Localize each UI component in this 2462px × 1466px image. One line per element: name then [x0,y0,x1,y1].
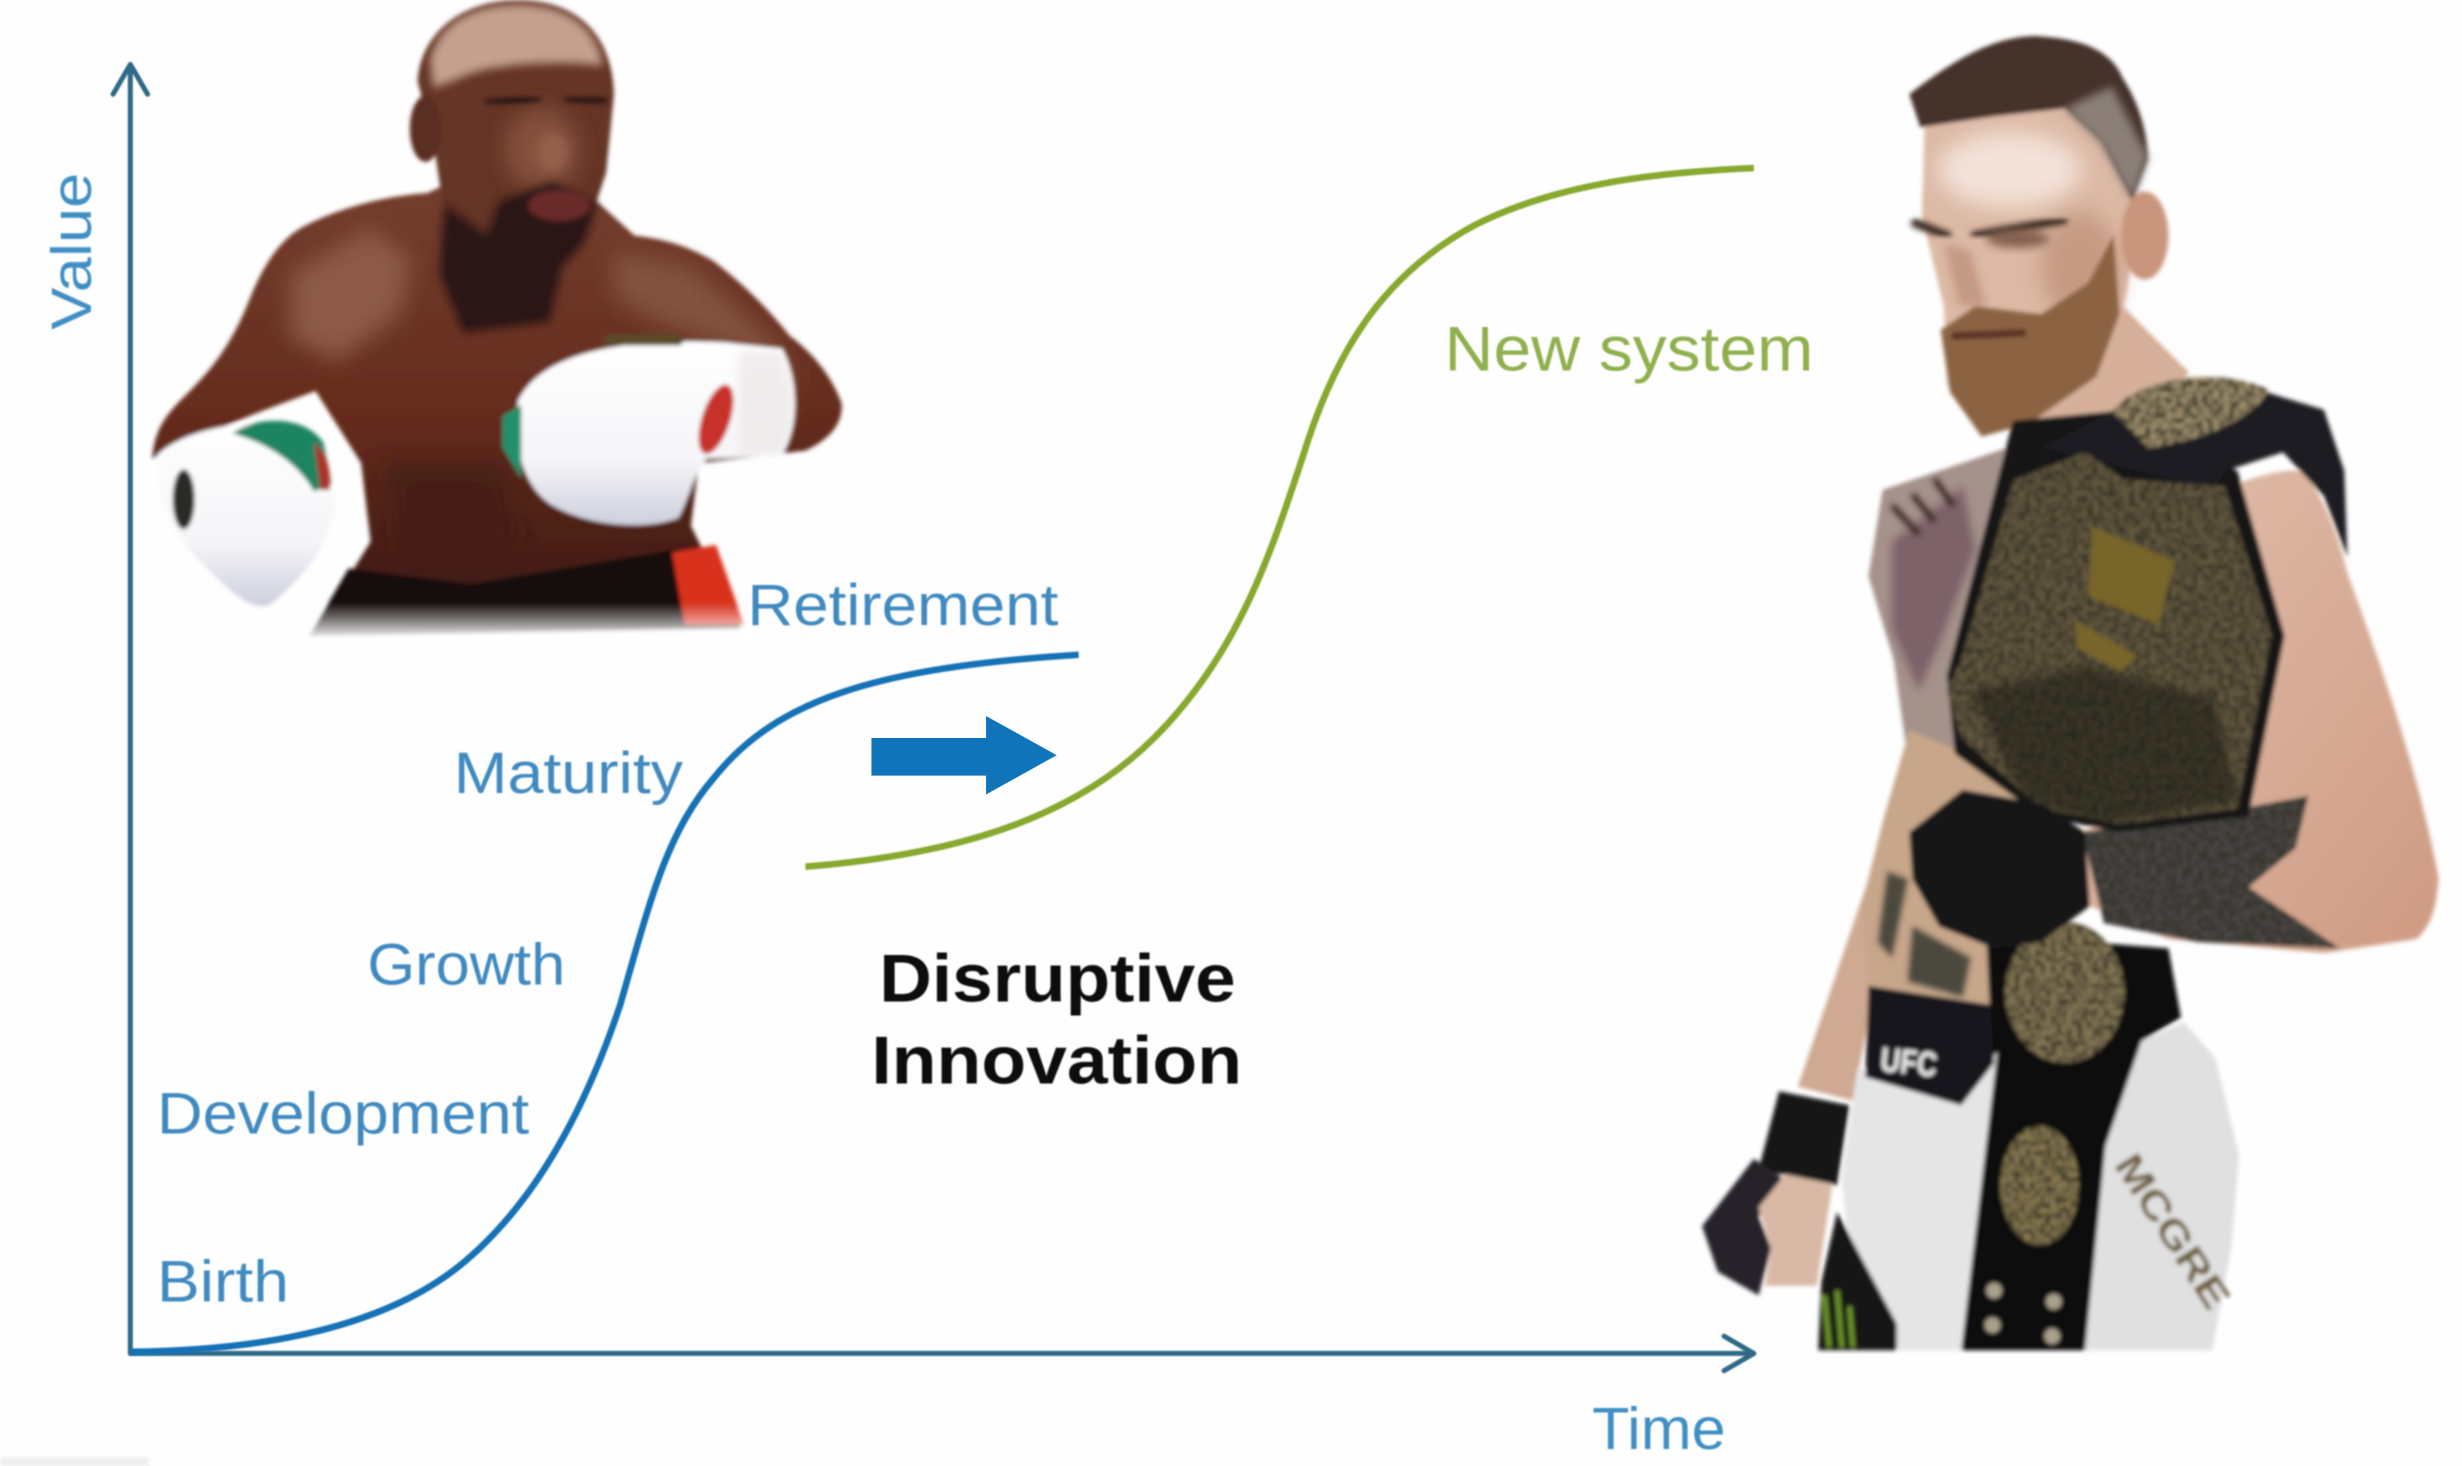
right glove green mark [502,405,521,479]
fighter neck [2010,306,2189,471]
belt studs [1985,1283,2062,1344]
fighter lower glove [1702,1159,1782,1295]
boxer belly shadow [385,463,518,550]
green S-curve: new system [805,168,1754,867]
axis label: Time: Time [1592,1395,1726,1462]
waistband logo: UFC [1879,1041,1939,1085]
boxer head [418,0,614,259]
fighter brow and eyes [1916,220,2063,236]
fighter nose shade [1944,243,1986,306]
belt main plate [1947,452,2272,824]
belt lower dark patch [1971,667,2237,824]
fighter chest tattoo [1892,487,1975,691]
chart axes [113,64,1754,1371]
fighter mouth [1955,333,2022,336]
boxer scalp highlight [430,5,603,88]
arrow: transition to new system [871,716,1057,794]
fighter hair fade [2065,86,2148,201]
fighter lower torso [1862,730,2041,1021]
waistband [1865,986,1994,1105]
right glove red mark [691,381,741,458]
fighter eye shadow [1986,229,2049,248]
boxer shorts trim [672,545,744,625]
right glove [516,341,795,525]
left glove green panel [232,421,331,491]
fighter lower hand [1759,1174,1832,1286]
fighter forehead highlight [1938,132,2082,207]
shoulder strap [2041,393,2347,557]
left shorts leg [1842,1052,1997,1350]
stage label: Retirement: Retirement [747,573,1058,638]
heading line 2: Innovation [871,1023,1242,1098]
blue S-curve: current system [130,655,1079,1352]
boxer beard [440,182,597,333]
stage label: Maturity: Maturity [454,741,683,806]
boxer torso and arms [152,173,842,620]
stage label: Growth: Growth [367,932,565,997]
dark side panel [1818,1212,1897,1350]
fighter hair [1909,36,2148,201]
fighter ear [2121,192,2168,279]
strap below hand [1961,934,2181,1350]
belt centre letters [2076,526,2175,672]
stage label: Development: Development [157,1082,529,1147]
left glove [157,423,336,606]
left glove mark [173,469,195,529]
fighter glove on wrist [1759,1091,1850,1185]
fighter right arm [2080,470,2438,953]
fighter beard [1941,236,2120,436]
photo: boxer [152,0,842,641]
fighter cheek shade [2041,212,2120,322]
value axis with arrow [113,64,148,1353]
belt backing [1947,411,2285,832]
upper belt medallion [2005,922,2124,1063]
fighter lower torso tattoo [1878,871,1971,997]
boxer nose [537,133,568,171]
time axis with arrow [130,1336,1754,1371]
label: New system: New system [1445,315,1814,385]
right shorts leg [2085,1022,2239,1350]
boxer mouth [528,190,590,221]
axis label: Value: Value [40,173,103,330]
boxer shorts fade [298,603,754,641]
green energy mark [1825,1291,1853,1347]
boxer cheek highlight [504,108,579,190]
bottom edge shade [0,1457,149,1466]
fighter chest [1868,447,2057,801]
glove lace patch [605,334,683,345]
right glove cuff shade [738,352,792,455]
fighter glove on belt [1909,790,2090,948]
heading: Disruptive Innovation [871,942,1242,1098]
fighter chest tattoo lines [1892,479,1953,534]
left glove red edge [314,443,330,490]
shoulder plate ornament [2112,377,2267,447]
heading line 1: Disruptive [879,942,1236,1017]
boxer ear [410,96,441,162]
shorts lettering: MCGRE [2106,1146,2239,1317]
lower belt medallion [2000,1126,2079,1245]
fighter left arm [1798,740,1923,1101]
fighter face [1922,94,2139,433]
boxer chest highlights [290,228,411,361]
forearm tattoo [2082,796,2340,948]
boxer eyes [490,97,603,104]
photo: fighter with title belt [1702,36,2438,1350]
boxer shorts [309,550,741,636]
stage label: Birth: Birth [157,1250,289,1315]
